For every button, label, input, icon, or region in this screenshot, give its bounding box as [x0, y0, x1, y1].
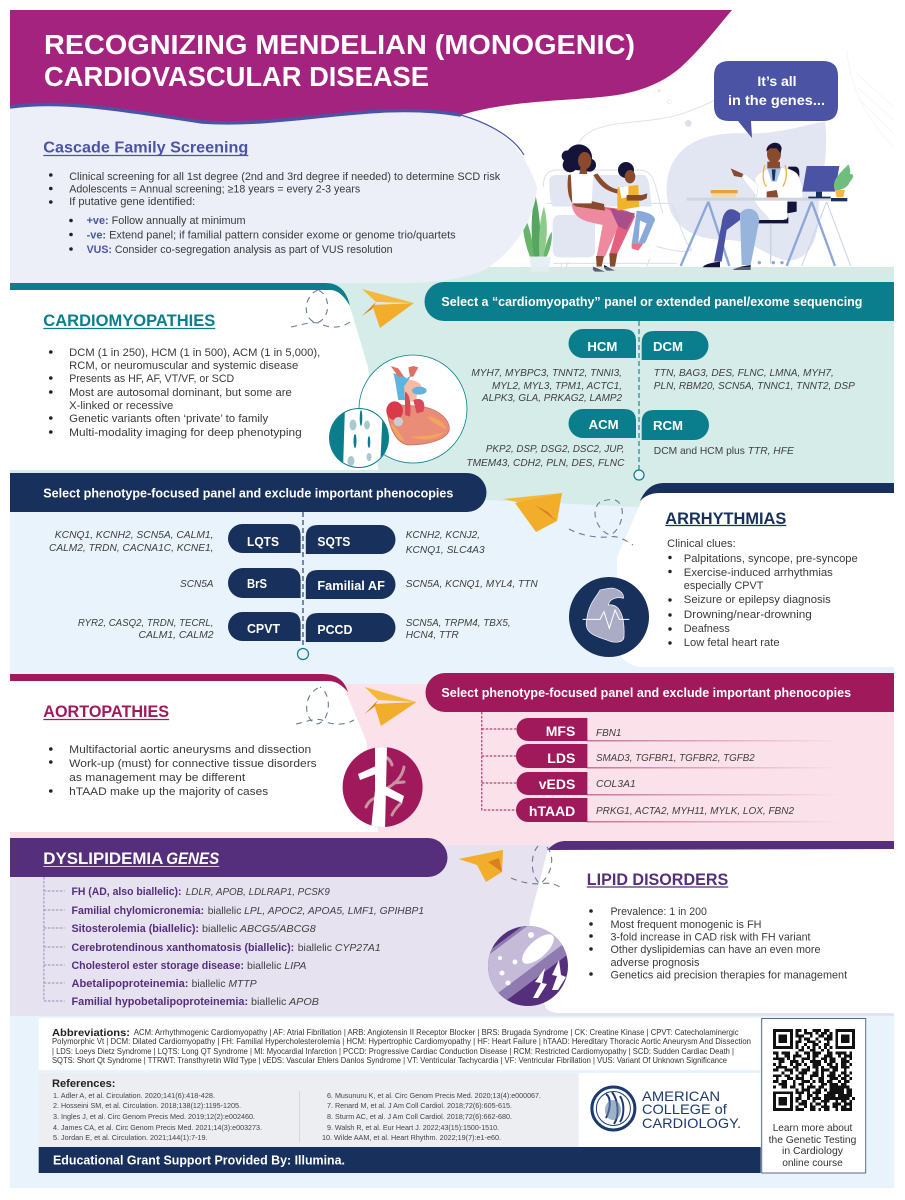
- left gene lists: RYR2, CASQ2, TRDN, TECRL,: [78, 617, 214, 629]
- section backgrounds: [10, 267, 894, 1188]
- bullet list: cardiomyopathy facts: RCM, or neuromuscular and systemic disease: [69, 360, 298, 372]
- pill: RCM: [642, 410, 709, 440]
- row: hTAAD: PRKG1, ACTA2, MYH11, MYLK, LOX, FBN2: [596, 805, 794, 817]
- bullet list: lipid disorder facts: Other dyslipidemias can have an even more: [610, 944, 820, 956]
- grant support bar: Educational Grant Support Provided By: Illumina.: [53, 1154, 345, 1168]
- bullet list: aortopathy facts: Multifactorial aortic aneurysms and dissection: [69, 744, 311, 756]
- HCM genes: ALPK3, GLA, PRKAG2, LAMP2: [481, 392, 622, 404]
- pill: RCM: RCM: [653, 418, 683, 433]
- pill: BrS: BrS: [247, 576, 267, 591]
- wave edge: [461, 115, 524, 155]
- row: MFS: [516, 718, 842, 742]
- header bar: Select phenotype-focused panel and exclude important phenocopies: [43, 486, 453, 500]
- header bar: DYSLIPIDEMIA: [43, 849, 163, 868]
- connector: [634, 321, 644, 480]
- gene row: familial chylomicronemia: Familial chylomicronemia:: [72, 905, 204, 917]
- flight path dashes: [291, 290, 350, 327]
- pill: HCM: HCM: [587, 339, 617, 354]
- pill: ACM: ACM: [589, 417, 619, 432]
- bullet list: screening guidance: Clinical screening for all 1st degree (2nd and 3rd degree if needed) to determine SCD risk: [69, 171, 501, 183]
- panel: abbreviations: [39, 1018, 760, 1070]
- row: MFS: MFS: [546, 723, 575, 739]
- title: RECOGNIZING MENDELIAN (MONOGENIC): [44, 29, 635, 60]
- QR caption: [769, 1122, 856, 1169]
- speech bubble: in the genes...: [728, 92, 825, 108]
- right gene lists: KCNH2, KCNJ2,: [406, 529, 480, 541]
- logo: American College of Cardiology: AMERICAN: [642, 1088, 720, 1104]
- logo: American College of Cardiology: COLLEGE of: [642, 1101, 727, 1117]
- row: hTAAD: hTAAD: [529, 803, 575, 819]
- bullet list: lipid disorder facts: Most frequent monogenic is FH: [610, 919, 762, 931]
- bullet list: lipid disorder facts: [589, 906, 847, 982]
- floor strip: [520, 267, 894, 283]
- pill: BrS: [228, 568, 301, 598]
- panel: arrhythmias: [569, 483, 894, 667]
- row: LDS: LDS: [547, 750, 575, 766]
- bullet list: lipid disorder facts: adverse prognosis: [610, 957, 700, 969]
- bullet list: aortopathy facts: [49, 744, 317, 798]
- panel: aortopathy gene selection: [426, 673, 894, 822]
- bullet list: cardiomyopathy facts: [49, 347, 320, 439]
- reference list: column 2: 6. Musunuru K, et al. Circ Genom Precis Med. 2020;13(4):e000067.: [327, 1091, 541, 1100]
- row: vEDS: vEDS: [539, 776, 575, 792]
- left gene lists: SCN5A: [180, 578, 214, 590]
- gene row: cerebrotendinous xanthomatosis: biallelic CYP27A1: [298, 942, 381, 954]
- reference list: column 1: 2. Hosseini SM, et al. Circulation. 2018;138(12):1195-1205.: [53, 1101, 241, 1110]
- paper plane: aortopathies: [365, 687, 417, 726]
- panel: cascade family screening: [10, 104, 537, 283]
- paper plane: lipid disorders: [459, 850, 503, 882]
- RCM genes: DCM and HCM plus TTR, HFE: [654, 445, 795, 457]
- paper plane: cardiomyopathies: [362, 289, 414, 328]
- pill: PCCD: [306, 613, 396, 642]
- pill: Familial AF: [306, 570, 396, 599]
- bullet list: cardiomyopathy facts: Genetic variants often ‘private’ to family: [69, 413, 269, 425]
- title banner: [10, 10, 732, 123]
- bullet list: screening guidance: [49, 171, 501, 256]
- DCM genes: PLN, RBM20, SCN5A, TNNC1, TNNT2, DSP: [654, 380, 855, 392]
- left gene lists: CALM2, TRDN, CACNA1C, KCNE1,: [49, 542, 214, 554]
- gene row: sitosterolemia: Sitosterolemia (biallelic):: [72, 923, 199, 935]
- icon: artery with plaque: [488, 926, 568, 1006]
- pill: CPVT: CPVT: [247, 621, 280, 636]
- left gene lists: KCNQ1, KCNH2, SCN5A, CALM1,: [55, 529, 213, 541]
- bullet list: lipid disorder facts: 3-fold increase in CAD risk with FH variant: [610, 932, 810, 944]
- desk and doctor: [681, 143, 853, 270]
- left gene lists: CALM1, CALM2: [138, 629, 214, 641]
- icon: heart muscle fibers: [329, 405, 389, 470]
- row: MFS: FBN1: [596, 727, 621, 739]
- pill: SQTS: SQTS: [317, 534, 351, 549]
- QR code: [773, 1029, 855, 1111]
- pill: LQTS: LQTS: [247, 534, 279, 549]
- HCM genes: MYL2, MYL3, TPM1, ACTC1,: [492, 380, 622, 392]
- pill: DCM: DCM: [653, 339, 683, 354]
- ACM genes: PKP2, DSP, DSG2, DSC2, JUP,: [486, 443, 624, 455]
- panel: arrhythmia gene selection: [10, 473, 538, 660]
- heading: aortopathies: AORTOPATHIES: [43, 702, 169, 721]
- panel: abbreviations: | LDS: Loeys Dietz Syndrome | LQTS: Long QT Syndrome | MI: Myocardial Infarction | PCCD: Progressive Cardiac Conduction Disease | RCM: Restricted Cardiomyopathy | SCD: Sudden Cardiac Death |: [52, 1047, 734, 1056]
- right gene lists: SCN5A, TRPM4, TBX5,: [406, 617, 511, 629]
- gene row: FH: FH (AD, also biallelic):: [72, 886, 182, 898]
- panel: abbreviations: SQTS: Short Qt Syndrome | TTRWT: Transthyretin Wild Type | vEDS: Vascular Ehlers Danlos Syndrome | VT: Ventricular Tachycardia | VF: Ventricular Fibrillation | VUS: Variant Of Unknown Significance: [52, 1056, 728, 1065]
- heading: lipid disorders: LIPID DISORDERS: [587, 870, 728, 889]
- logo: American College of Cardiology: [579, 1073, 760, 1147]
- speech bubble: It’s all: [757, 73, 797, 89]
- gene row: abetalipoproteinemia: [72, 978, 257, 990]
- panel: cardiomyopathy gene selection: [425, 282, 894, 480]
- title: CARDIOVASCULAR DISEASE: [44, 61, 429, 92]
- header bar: GENES: [166, 849, 220, 868]
- clinical clues list: Deafness: [684, 623, 730, 635]
- flight path dashes: [511, 846, 560, 887]
- bullet list: aortopathy facts: Work-up (must) for connective tissue disorders: [69, 758, 317, 770]
- QR code panel: [762, 1018, 866, 1173]
- reference list: column 1: 1. Adler A, et al. Circulation. 2020;141(6):418-428.: [53, 1091, 215, 1100]
- row: LDS: SMAD3, TGFBR1, TGFBR2, TGFB2: [596, 752, 755, 764]
- header bar: [425, 282, 894, 321]
- plant: [523, 193, 552, 272]
- grant support bar: [39, 1147, 761, 1173]
- pill: Familial AF: Familial AF: [317, 578, 385, 593]
- pill: LQTS: [228, 524, 301, 553]
- panel: abbreviations: Polymorphic Vt | DCM: Dilated Cardiomyopathy | FH: Familial Hypercholesterolemia | HCM: Hypertrophic Cardiomyopathy | HF: Heart Failure | hTAAD: Hereditary Thoracic Aortic Aneurysm And Dissection: [52, 1037, 751, 1046]
- header bar: [10, 473, 487, 512]
- connector: [482, 712, 516, 810]
- clinical clues list: Exercise-induced arrhythmias: [684, 567, 833, 579]
- pill: SQTS: [306, 525, 396, 554]
- header bar: Select phenotype-focused panel and exclude important phenocopies: [441, 686, 851, 700]
- QR caption: online course: [782, 1157, 843, 1169]
- gene row: sitosterolemia: biallelic ABCG5/ABCG8: [202, 923, 316, 935]
- header bar: [10, 838, 448, 877]
- pill: CPVT: [228, 612, 301, 641]
- reference list: column 1: 4. James CA, et al. Circ Genom Precis Med. 2021;14(3):e003273.: [53, 1123, 262, 1132]
- panel: abbreviations: ACM: Arrhythmogenic Cardiomyopathy | AF: Atrial Fibrillation | ARB: Angiotensin II Receptor Blocker | BRS: Brugada Syndrome | CK: Creatine Kinase | CPVT: Catecholaminergic: [134, 1028, 739, 1037]
- row: hTAAD: [516, 798, 842, 822]
- pill: DCM: [642, 331, 708, 360]
- mother and child: [562, 144, 655, 272]
- clinical clues list: Low fetal heart rate: [684, 637, 780, 649]
- reference list: column 2: 9. Walsh R, et al. Eur Heart J. 2022;43(15):1500-1510.: [327, 1123, 499, 1132]
- connector: [44, 877, 65, 1001]
- icon: heart with ECG: [569, 577, 649, 657]
- left gene lists: [49, 529, 214, 641]
- bullet list: screening guidance: VUS: Consider co-segregation analysis as part of VUS resolution: [87, 244, 393, 256]
- gene row: abetalipoproteinemia: Abetalipoproteinemia:: [72, 978, 188, 990]
- connector: [298, 512, 308, 660]
- QR caption: Learn more about: [773, 1122, 852, 1134]
- panel: lipid disorders: [511, 841, 894, 1013]
- reference list: column 2: 7. Renard M, et al. J Am Coll Cardiol. 2018;72(6):605-615.: [327, 1101, 512, 1110]
- gene row: abetalipoproteinemia: biallelic MTTP: [192, 978, 257, 990]
- reference list: column 1: [53, 1091, 262, 1142]
- gene row: sitosterolemia: [72, 923, 316, 935]
- gene row: familial chylomicronemia: [72, 905, 424, 917]
- bullet list: aortopathy facts: as management may be different: [69, 772, 245, 784]
- panel: references: [39, 1073, 579, 1147]
- heading: cardiomyopathies: CARDIOMYOPATHIES: [43, 311, 215, 330]
- heading: arrhythmias: ARRHYTHMIAS: [665, 509, 786, 528]
- gene row: familial chylomicronemia: biallelic LPL, APOC2, APOA5, LMF1, GPIHBP1: [208, 905, 424, 917]
- ACM genes: TMEM43, CDH2, PLN, DES, FLNC: [466, 457, 625, 469]
- gene row: cholesterol ester storage disease: Cholesterol ester storage disease:: [72, 960, 244, 972]
- icon: anatomical heart: [359, 355, 467, 463]
- paper plane: arrhythmias: [503, 493, 562, 532]
- bullet list: cardiomyopathy facts: Most are autosomal dominant, but some are: [69, 387, 292, 399]
- bullet list: lipid disorder facts: Prevalence: 1 in 200: [610, 906, 707, 918]
- DCM genes: [654, 367, 855, 392]
- right gene lists: [406, 529, 538, 641]
- ACM genes: [466, 443, 625, 469]
- QR caption: the Genetic Testing: [769, 1134, 856, 1146]
- bullet list: cardiomyopathy facts: Presents as HF, AF, VT/VF, or SCD: [69, 373, 234, 385]
- reference list: column 2: [322, 1091, 541, 1142]
- clinical clues list: Seizure or epilepsy diagnosis: [684, 594, 831, 606]
- reference list: column 2: 8. Sturm AC, et al. J Am Coll Cardiol. 2018;72(6):662-680.: [327, 1112, 512, 1121]
- bullet list: cardiomyopathy facts: Multi-modality imaging for deep phenotyping: [69, 427, 302, 439]
- header bar: [426, 673, 894, 712]
- pill: ACM: [568, 409, 636, 438]
- icon: aorta branches: [343, 746, 423, 830]
- gene row: FH: [72, 886, 330, 898]
- speech bubble: [714, 61, 838, 138]
- bullet list: screening guidance: If putative gene identified:: [69, 196, 195, 208]
- gene row: cholesterol ester storage disease: biallelic LIPA: [247, 960, 306, 972]
- HCM genes: [471, 367, 622, 404]
- row: vEDS: [516, 772, 842, 796]
- QR caption: in Cardiology: [782, 1145, 844, 1157]
- gene row: FH: LDLR, APOB, LDLRAP1, PCSK9: [186, 886, 330, 898]
- right gene lists: HCN4, TTR: [406, 629, 459, 641]
- illustration: doctor consulting with mother and child: [523, 50, 893, 275]
- reference list: column 1: 5. Jordan E, et al. Circulation. 2021;144(1):7-19.: [53, 1133, 208, 1142]
- flight path dashes: [569, 500, 633, 545]
- logo: American College of Cardiology: CARDIOLOGY.: [642, 1115, 741, 1131]
- right gene lists: KCNQ1, SLC4A3: [406, 544, 485, 556]
- heading: cascade family screening: Cascade Family Screening: [43, 140, 248, 156]
- row: vEDS: COL3A1: [596, 778, 636, 790]
- clinical clues list: especially CPVT: [684, 580, 764, 592]
- bullet list: lipid disorder facts: Genetics aid precision therapies for management: [610, 970, 847, 982]
- bullet list: screening guidance: Adolescents = Annual screening; ≥18 years = every 2-3 years: [69, 184, 361, 196]
- bullet list: cardiomyopathy facts: X-linked or recessive: [69, 400, 173, 412]
- flight path dashes: [296, 687, 354, 724]
- bullet list: cardiomyopathy facts: DCM (1 in 250), HCM (1 in 500), ACM (1 in 5,000),: [69, 347, 320, 359]
- gene row: familial hypobetalipoproteinemia: Familial hypobetalipoproteinemia:: [72, 996, 248, 1008]
- reference list: column 2: 10. Wilde AAM, et al. Heart Rhythm. 2022;19(7):e1-e60.: [322, 1133, 501, 1142]
- panel: references: References:: [52, 1078, 116, 1090]
- header bar: Select a “cardiomyopathy” panel or extended panel/exome sequencing: [441, 295, 862, 309]
- panel: dyslipidemia genes: [10, 838, 448, 1008]
- clinical clues list: Clinical clues:: [667, 538, 736, 550]
- reference list: column 1: 3. Ingles J, et al. Circ Genom Precis Med. 2019;12(2):e002460.: [53, 1112, 255, 1121]
- panel: cardiomyopathies: [10, 283, 378, 470]
- panel: aortopathies: [10, 674, 378, 832]
- bullet list: aortopathy facts: hTAAD make up the majority of cases: [69, 786, 269, 798]
- panel: abbreviations: Abbreviations:: [52, 1027, 130, 1039]
- pill: PCCD: PCCD: [317, 622, 352, 637]
- clinical clues list: [667, 538, 858, 649]
- HCM genes: MYH7, MYBPC3, TNNT2, TNNI3,: [471, 367, 622, 379]
- bullet list: screening guidance: +ve: Follow annually at minimum: [87, 215, 246, 227]
- DCM genes: TTN, BAG3, DES, FLNC, LMNA, MYH7,: [654, 367, 834, 379]
- row: LDS: [516, 744, 842, 768]
- bullet list: screening guidance: -ve: Extend panel; if familial pattern consider exome or genome trio/quartets: [87, 230, 456, 242]
- clinical clues list: Drowning/near-drowning: [684, 609, 812, 621]
- gene row: cerebrotendinous xanthomatosis: Cerebrotendinous xanthomatosis (biallelic):: [72, 942, 294, 954]
- gene row: familial hypobetalipoproteinemia: biallelic APOB: [251, 996, 319, 1008]
- clinical clues list: Palpitations, syncope, pre-syncope: [684, 553, 858, 565]
- right gene lists: SCN5A, KCNQ1, MYL4, TTN: [406, 578, 538, 590]
- pill: HCM: [568, 329, 636, 358]
